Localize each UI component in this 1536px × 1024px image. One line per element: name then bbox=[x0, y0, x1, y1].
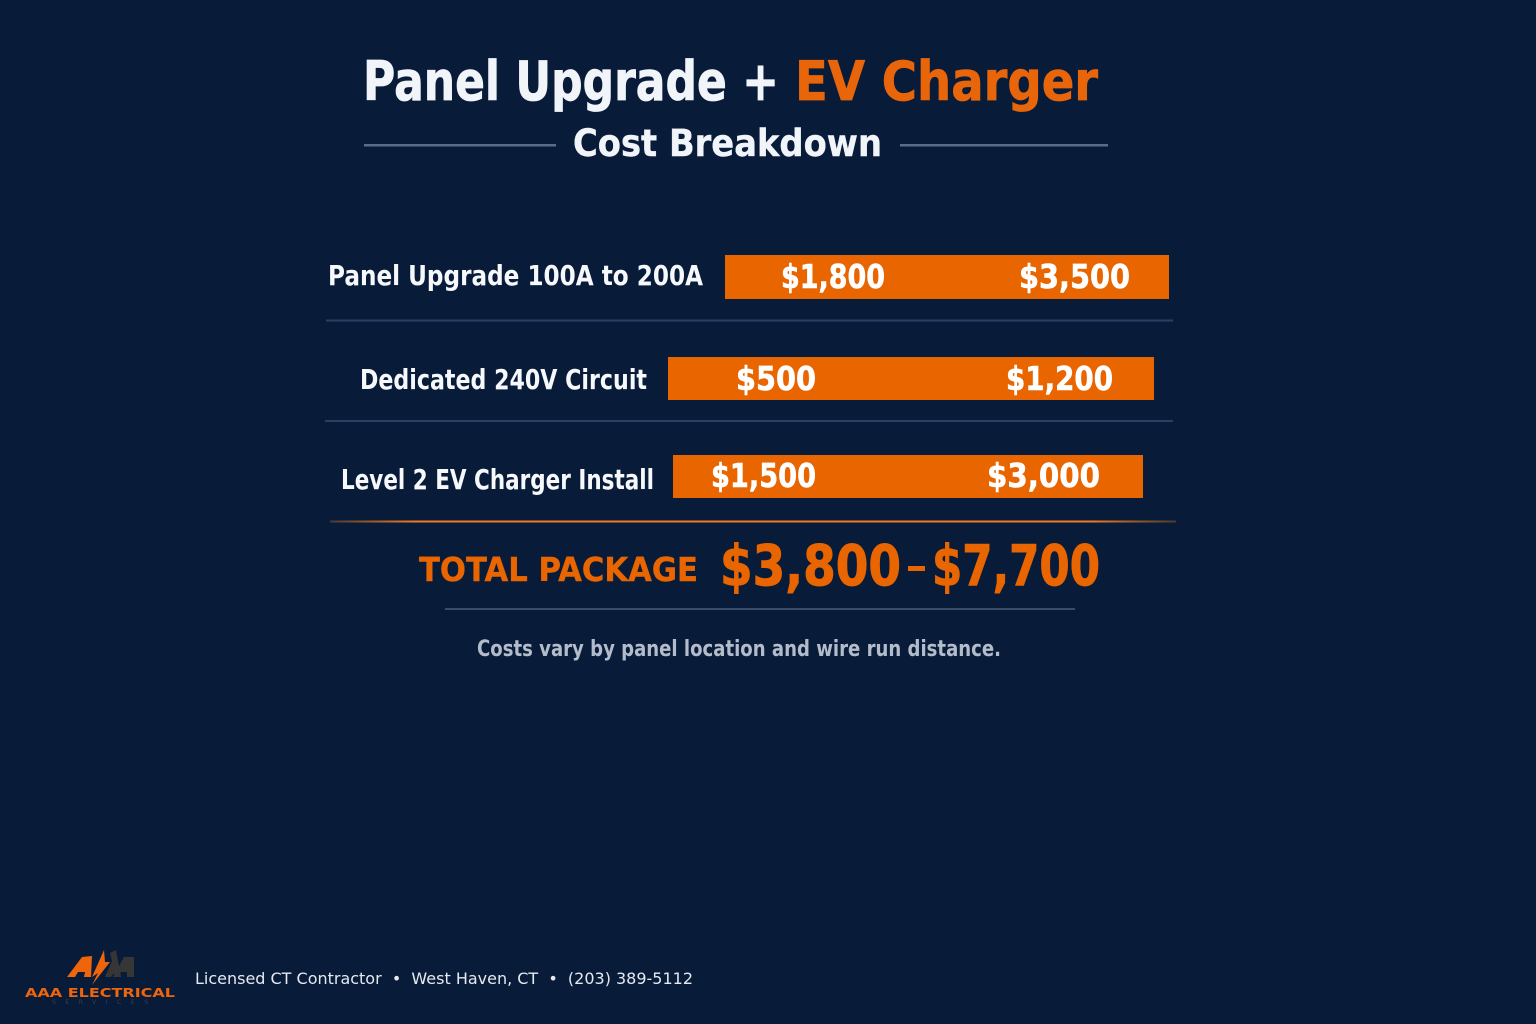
row: panel upgrade: Panel Upgrade 100A to 200A bbox=[328, 259, 703, 292]
total package: $3,800 bbox=[720, 534, 901, 599]
logo: AAA ELECTRICAL bbox=[25, 986, 175, 1000]
row: EV charger install: $3,000 bbox=[987, 456, 1100, 495]
logo bbox=[25, 950, 175, 1006]
logo: SERVICES bbox=[52, 999, 148, 1006]
row: dedicated circuit: Dedicated 240V Circuit bbox=[360, 363, 647, 396]
row: panel upgrade bbox=[328, 255, 1169, 299]
row: panel upgrade: $3,500 bbox=[1019, 257, 1130, 296]
total package: TOTAL PACKAGE bbox=[419, 550, 698, 589]
icon: AAA lightning mark bbox=[67, 950, 134, 985]
subtitle: Cost Breakdown bbox=[573, 122, 882, 165]
title bbox=[363, 50, 1098, 113]
total package: $7,700 bbox=[932, 534, 1100, 599]
row: EV charger install: $1,500 bbox=[711, 456, 816, 495]
row: dedicated circuit: $1,200 bbox=[1006, 359, 1113, 398]
title: Panel Upgrade + bbox=[363, 50, 779, 113]
footer contact text: Licensed CT Contractor • West Haven, CT • (203) 389-5112 bbox=[195, 969, 693, 988]
row: EV charger install bbox=[341, 455, 1143, 498]
footnote: Costs vary by panel location and wire run distance. bbox=[477, 637, 1001, 662]
total package bbox=[419, 534, 1100, 599]
row: dedicated circuit: $500 bbox=[736, 359, 816, 398]
row: dedicated circuit bbox=[360, 357, 1154, 400]
row: panel upgrade: $1,800 bbox=[781, 257, 885, 296]
row: EV charger install: Level 2 EV Charger Install bbox=[341, 463, 654, 496]
title: EV Charger bbox=[795, 50, 1098, 113]
